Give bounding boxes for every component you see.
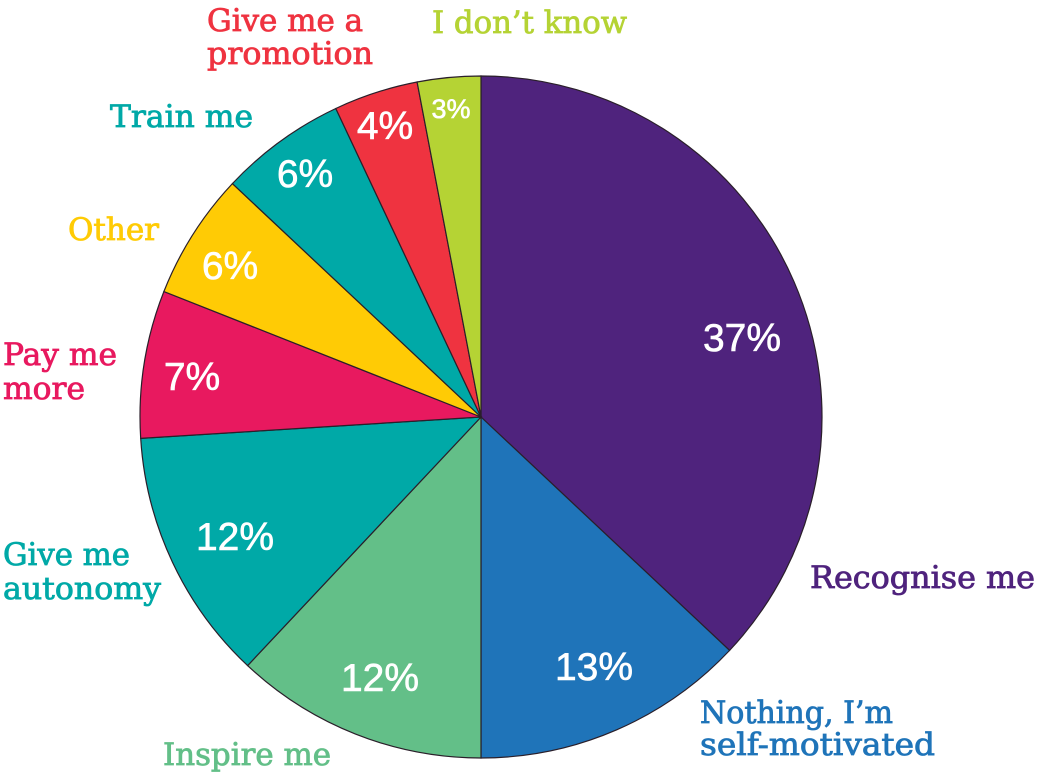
category labels: Give me a (207, 3, 363, 39)
slice: Other 6% (164, 184, 481, 417)
slice: Pay me more 7% (140, 292, 481, 438)
percentage labels: 12% (341, 657, 419, 700)
category labels: Other (68, 212, 159, 248)
category labels: I don’t know (432, 5, 627, 41)
pie chart (140, 76, 822, 758)
percentage labels: 7% (164, 356, 220, 399)
slice: Promotion 4% (336, 82, 481, 417)
category labels: autonomy (3, 571, 161, 607)
slice: Recognise me 37% (481, 76, 822, 650)
category labels: promotion (207, 36, 373, 72)
category labels: Recognise me (810, 560, 1035, 596)
slice: Train me 6% (232, 108, 481, 417)
percentage labels: 6% (277, 153, 333, 196)
category labels: Give me (3, 537, 130, 573)
category labels: Train me (110, 99, 253, 135)
category labels: Pay me (3, 337, 117, 373)
percentage labels (164, 94, 781, 700)
category labels: Inspire me (163, 737, 331, 773)
percentage labels: 4% (357, 105, 413, 148)
slice: Give me autonomy 12% (141, 417, 481, 666)
slice: Nothing 13% (481, 417, 730, 758)
percentage labels: 3% (431, 94, 471, 124)
percentage labels: 6% (202, 245, 258, 288)
category labels: more (3, 371, 85, 407)
percentage labels: 37% (703, 317, 781, 360)
category labels: self-motivated (700, 727, 935, 763)
slice: Inspire me 12% (248, 417, 481, 758)
percentage labels: 13% (555, 646, 633, 689)
slice: I don't know 3% (417, 76, 481, 417)
category labels: Nothing, I’m (700, 695, 893, 731)
percentage labels: 12% (196, 516, 274, 559)
